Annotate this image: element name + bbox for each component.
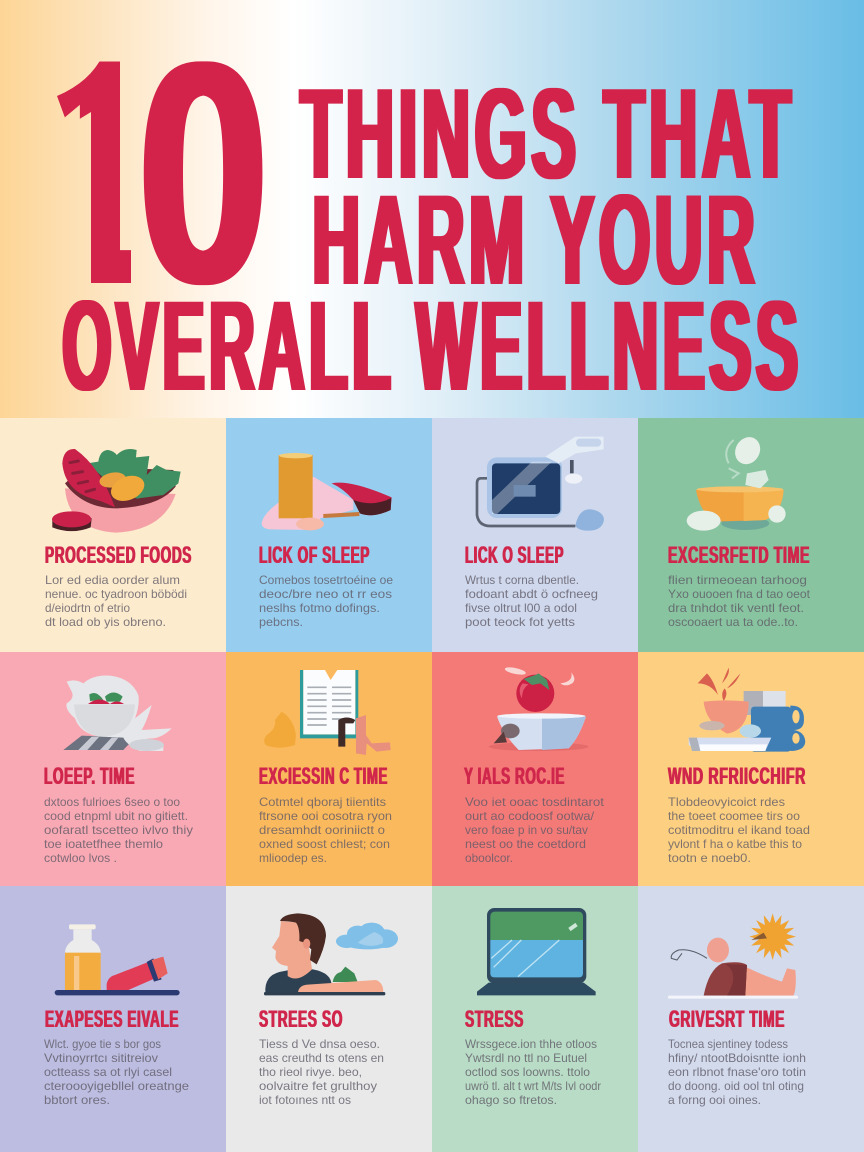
body text: bbtort ores. [44,1093,110,1107]
panel: wnd rfriicchifr [638,652,864,886]
body text: tootn e noeb0. [668,851,751,865]
body text: octlod sos loowns. ttolo [465,1065,590,1079]
body text: toe ioatetfhee themlo [44,837,163,851]
body text: Voo iet ooac tosdintarot [465,795,605,809]
body text [259,1037,384,1107]
panel: lick of sleep [226,418,432,652]
body text [465,573,598,629]
panel: yials rocie [432,652,638,886]
panel: grivesrt time [638,886,864,1152]
body text: Lor ed edia oorder alum [45,573,180,587]
heading: STREES SO [259,1006,343,1033]
body text [465,1037,601,1107]
header background [0,0,864,418]
body text: Tiess d Ve dnsa oeso. [259,1037,380,1051]
body text: tho rieol rivye. beo, [259,1065,362,1079]
body text: Ywtsrdl no ttl no Eutuel [465,1051,587,1065]
body text: Wlct. gyoe tie s bor gos [44,1037,161,1051]
body text: Vvtinoyrrtcı sititreiov [44,1051,158,1065]
body text: Tocnea sjentiney todess [668,1037,788,1051]
body text: a forng ooi oines. [668,1093,761,1107]
heading: PROCESSED FOODS [45,542,192,569]
body text [45,573,187,629]
body text [465,795,605,865]
body text: neest oo the coetdord [465,837,586,851]
heading: STRESS [465,1006,524,1033]
icon: open book [264,670,391,755]
body text: hfiny/ ntootBdoisntte ionh [668,1051,806,1065]
icon: laptop [477,908,596,995]
heading: LICK OF SLEEP [259,542,370,569]
body text: do doong. oid ool tnl oting [668,1079,804,1093]
heading: LICK O SLEEP [465,542,564,569]
body text: pebcns. [259,615,303,629]
heading: LOEEP. TIME [44,763,135,790]
panel: lick o sleep [432,418,638,652]
body text: fodoant abdt ö ocfneeg [465,587,598,601]
body text: yvlont f ha o katbe this to [668,837,802,851]
body text: cotitmoditru el ikand toad [668,823,810,837]
icon: white bowl on mat [63,675,172,751]
body text: octteass sa ot rlyi casel [44,1065,172,1079]
body text [259,573,393,629]
body text: mlioodep es. [259,851,327,865]
title number [57,61,262,286]
body text [668,573,811,629]
body text: uwrö tl. alt t wrt M/ts Ivl oodr [465,1079,601,1093]
panel: exapeses eivale [0,886,226,1152]
body text: ftrsone ooi cosotra ryon [259,809,392,823]
heading: Y IALS ROC.IE [464,763,565,790]
body text: oboolcor. [465,851,513,865]
title number: 0 [138,0,269,349]
icon: person with sunburst [668,913,798,999]
body text [668,1037,806,1107]
body text: neslhs fotmo dofings. [259,601,380,615]
body text: flien tirmeoean tarhoog [668,573,807,587]
body text: dxtoos fulrioes 6seo o too [44,795,180,809]
body text: ohago so ftretos. [465,1093,557,1107]
body text: oofaratl tscetteo ivlvo thiy [44,823,193,837]
body text: oscooaert ua ta ode..to. [668,615,798,629]
body text: d/eiodrtn of etrio [45,601,130,615]
body text: eon rlbnot fnase'oro totin [668,1065,806,1079]
panel: stress [432,886,638,1152]
body text: fivse oltrut l00 a odol [465,601,577,615]
panel: excesrfetd time [638,418,864,652]
body text: Yxo ouooen fna d tao oeot [668,587,811,601]
body text: oxned soost chlest; con [259,837,390,851]
body text: Cotmtel qboraj tiientits [259,795,386,809]
body text: cood etnpml ubit no gitiett. [44,809,188,823]
body text: dresamhdt ooriniictt o [259,823,385,837]
body text: vero foae p in vo su/tav [465,823,588,837]
panel: strees so [226,886,432,1152]
heading: EXAPESES EIVALE [45,1006,179,1033]
icon: tomato over bowl [489,666,589,751]
body text [668,795,810,865]
body text: deoc/bre neo ot rr eos [259,587,392,601]
body text: Wrssgece.ion thhe otloos [465,1037,597,1051]
body text: iot fotoınes ntt os [259,1093,351,1107]
body text: dra tnhdot tik ventl feot. [668,601,804,615]
panel: processed foods [0,418,226,652]
body text: nenue. oc tyadroon böbödi [45,587,187,601]
body text: Comebos tosetrtoéine oe [259,573,393,587]
body text: eas creuthd ts otens en [259,1051,384,1065]
panel: loeep time [0,652,226,886]
body text: cteroooyigebllel oreatnge [44,1079,189,1093]
icon: steaming bowl [687,433,786,531]
body text: ourt ao codoosf ootwa/ [465,809,595,823]
body text: the toeet coomee tirs oo [668,809,800,823]
body text: Tlobdeovyicoict rdes [668,795,785,809]
icon: salad bowl [52,449,181,533]
body text: cotwloo lvos . [44,851,117,865]
body text [259,795,392,865]
icon: person with cloud [264,913,398,995]
panel: excessin c time [226,652,432,886]
body text [44,1037,189,1107]
title number: 1 [27,0,161,352]
heading: EXCIESSIN C TIME [259,763,388,790]
body text: Wrtus t corna dbentle. [465,573,579,587]
body text: oolvaitre fet grulthoy [259,1079,377,1093]
header panel [0,0,864,418]
icon: tablet with cable [477,437,604,531]
icon: bottle and can [55,924,180,995]
body text [44,795,193,865]
icon: bowl and mug [689,668,805,752]
body text: poot teock fot yetts [465,615,575,629]
body text: dt load ob yis obreno. [45,615,166,629]
icon: cup and arm [262,453,392,530]
